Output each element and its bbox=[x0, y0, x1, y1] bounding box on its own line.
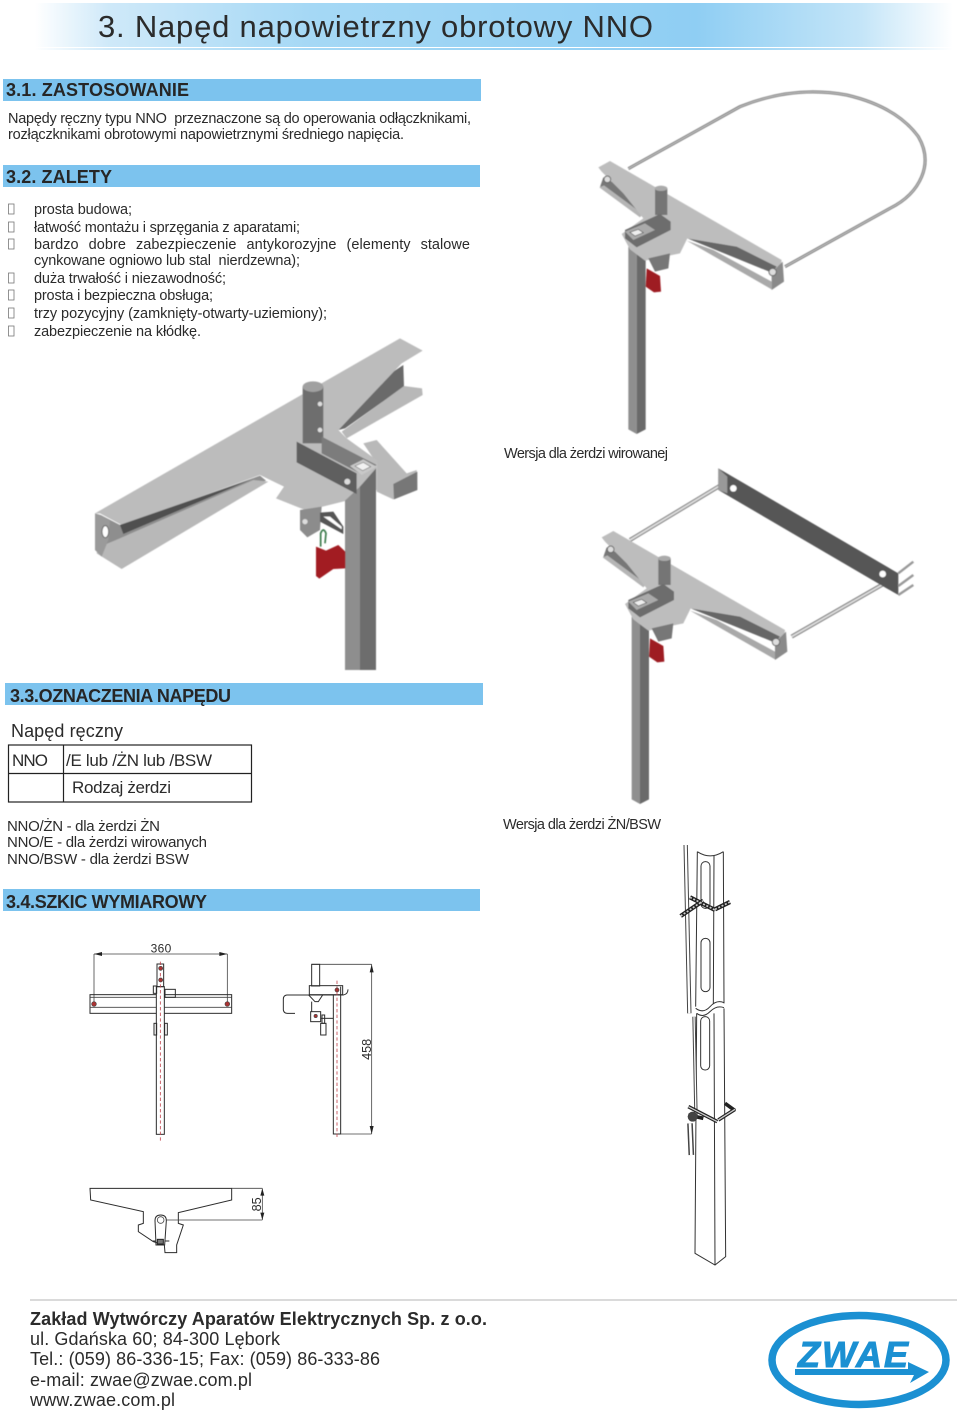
footer divider bbox=[30, 1299, 957, 1301]
section 3.3 heading bbox=[5, 683, 483, 706]
section 3.4 heading bbox=[3, 889, 480, 912]
list: advantages bbox=[8, 202, 470, 340]
dimensional sketch: front view: 360 bbox=[151, 942, 172, 956]
dimensional sketch: side view bbox=[283, 964, 374, 1138]
footer: company contact details: www.zwae.com.pl bbox=[29, 1390, 175, 1410]
footer: company contact details: Zakład Wytwórczy Aparatów Elektrycznych Sp. z o.o. bbox=[30, 1309, 487, 1329]
illustration: version with flat bar bbox=[602, 468, 913, 804]
text block: application description bbox=[8, 111, 471, 143]
caption: ZN/BSW version: Wersja dla żerdzi ŻN/BSW bbox=[503, 815, 661, 833]
text block: application description: rozłączknikami obrotowymi napowietrznymi średniego napięcia. bbox=[8, 127, 404, 143]
designation legend: NNO/E - dla żerdzi wirowanych bbox=[7, 834, 207, 851]
designation table: NNO bbox=[12, 751, 48, 770]
list: advantages: prosta i bezpieczna obsługa; bbox=[34, 288, 213, 304]
title band: 3. Napęd napowietrzny obrotowy NNO bbox=[98, 9, 653, 44]
designation table bbox=[8, 745, 252, 802]
dimensional sketch: front view bbox=[90, 942, 232, 1141]
footer: company contact details: ul. Gdańska 60; 84-300 Lębork bbox=[30, 1329, 281, 1349]
dimensional sketch: side view: 458 bbox=[360, 1039, 374, 1060]
designation table: /E lub /ŻN lub /BSW bbox=[66, 751, 212, 770]
footer: company contact details: Tel.: (059) 86-336-15; Fax: (059) 86-333-86 bbox=[30, 1349, 380, 1369]
designation legend: NNO/ŻN - dla żerdzi ŻN bbox=[7, 817, 160, 835]
illustration: version for spun pole bbox=[598, 92, 925, 434]
designation legend bbox=[7, 817, 207, 868]
illustration: large bracket detail bbox=[95, 338, 423, 670]
list: advantages: bardzo dobre zabezpieczenie antykorozyjne (elementy stalowe bbox=[34, 237, 470, 253]
list: advantages: prosta budowa; bbox=[34, 202, 132, 218]
caption: spun pole version: Wersja dla żerdzi wirowanej bbox=[504, 446, 668, 462]
footer: company contact details bbox=[29, 1309, 487, 1410]
section 3.1 heading: 3.1. ZASTOSOWANIE bbox=[6, 80, 189, 100]
section 3.1 heading bbox=[3, 79, 481, 101]
text block: application description: Napędy ręczny typu NNO przeznaczone są do operowania odłączknikami, bbox=[8, 111, 471, 127]
section 3.3 heading: 3.3.OZNACZENIA NAPĘDU bbox=[10, 686, 231, 706]
illustration: ZN/BSW pole line drawing bbox=[681, 845, 735, 1265]
logo: ZWAE: ZWAE bbox=[797, 1334, 909, 1375]
dimensional sketch: top view bbox=[90, 1188, 264, 1253]
section 3.2 heading: 3.2. ZALETY bbox=[6, 167, 112, 187]
footer: company contact details: e-mail: zwae@zwae.com.pl bbox=[30, 1370, 252, 1390]
logo: ZWAE bbox=[772, 1316, 946, 1404]
designation legend: NNO/BSW - dla żerdzi BSW bbox=[7, 851, 190, 868]
title band bbox=[35, 3, 953, 50]
list: advantages: duża trwałość i niezawodność; bbox=[34, 271, 226, 287]
list: advantages: trzy pozycyjny (zamknięty-otwarty-uziemiony); bbox=[34, 306, 327, 322]
section 3.4 heading: 3.4.SZKIC WYMIAROWY bbox=[6, 892, 207, 912]
list: advantages: zabezpieczenie na kłódkę. bbox=[34, 324, 201, 340]
designation table: Rodzaj żerdzi bbox=[72, 778, 171, 797]
list: advantages: łatwość montażu i sprzęgania z aparatami; bbox=[34, 220, 300, 236]
section 3.2 heading bbox=[3, 165, 480, 187]
dimensional sketch: top view: 85 bbox=[250, 1197, 264, 1211]
label: manual drive: Napęd ręczny bbox=[11, 721, 123, 741]
list: advantages: cynkowane ogniowo lub stal nierdzewna); bbox=[34, 253, 300, 269]
